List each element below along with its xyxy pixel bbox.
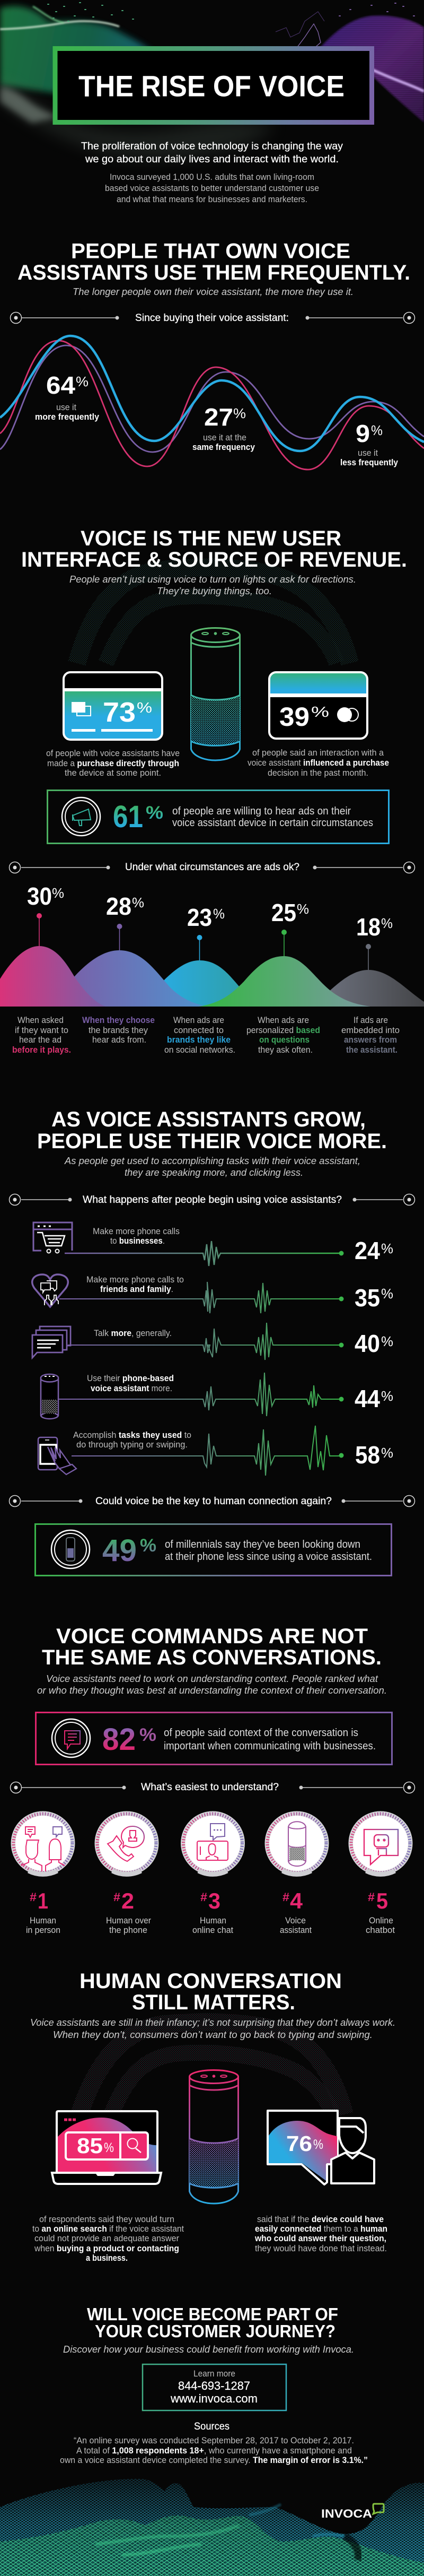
icon: video chat	[197, 1824, 228, 1860]
captions: ad circumstances: the brands they	[89, 1026, 148, 1035]
captions: ad circumstances: When ads are	[258, 1016, 309, 1025]
stat: 64%: more frequently	[35, 412, 100, 422]
intro text: The proliferation of voice technology is changing the way	[81, 140, 343, 152]
section 5 heading: STILL MATTERS.	[132, 1991, 295, 2014]
icon: heart with people	[32, 1274, 68, 1307]
divider: since buying: Since buying their voice assistant:	[135, 313, 289, 324]
stat: 27%: %	[233, 405, 246, 421]
captions: ad circumstances: If ads are	[354, 1016, 388, 1025]
closing heading	[63, 2304, 354, 2355]
section 3 heading	[37, 1108, 387, 1178]
row: voice assistant 44%: %	[381, 1388, 393, 1404]
card: 39%: 39	[279, 702, 310, 732]
rank label: Online	[369, 1916, 393, 1926]
section 1 heading: ASSISTANTS USE THEM FREQUENTLY.	[17, 261, 410, 284]
divider: ads ok: Under what circumstances are ads ok?	[125, 862, 299, 873]
icon: laptop 85%: %	[104, 2140, 114, 2155]
rank label: #	[200, 1890, 207, 1904]
rank label	[366, 1888, 395, 1935]
row: tasks 58%: %	[381, 1445, 393, 1461]
rank label: #	[368, 1890, 375, 1904]
captions: ad circumstances: brands they like	[167, 1035, 231, 1045]
row: tasks 58%: 58	[355, 1441, 380, 1469]
logo: Invoca: INVOCA	[321, 2507, 372, 2520]
callout: 82%	[36, 1713, 392, 1765]
section 3 heading: AS VOICE ASSISTANTS GROW,	[51, 1108, 366, 1131]
callout: 61%: voice assistant device in certain circumstances	[172, 817, 373, 829]
callout: 61%	[48, 791, 389, 844]
icon: speech bubble and person 76%: 76	[286, 2131, 312, 2156]
rank label: Voice	[285, 1916, 306, 1926]
divider: human connection: Could voice be the key to human connection again?	[95, 1496, 332, 1507]
callout: 49%	[35, 1524, 391, 1576]
card: 73%	[64, 672, 162, 740]
section 4 heading	[37, 1625, 387, 1696]
icon: chatbot bubble	[364, 1829, 398, 1864]
pin: 28%: 28	[106, 892, 131, 920]
pin: 28%: %	[132, 895, 144, 910]
icon: browser cart	[33, 1222, 72, 1253]
caption: 85%: to an online search if the voice assistant	[32, 2224, 184, 2234]
sources	[60, 2421, 368, 2465]
rank label: #	[30, 1890, 37, 1904]
caption: 76%: they would have done that instead.	[255, 2244, 387, 2253]
sources: own a voice assistant device completed the survey. The margin of error is 3.1%.”	[60, 2456, 368, 2465]
stat: 27%: use it at the	[203, 433, 246, 443]
caption: 76%: easily connected them to a human	[255, 2224, 387, 2234]
contact box: Learn more	[193, 2369, 235, 2379]
callout: 82%: of people said context of the conversation is	[164, 1727, 358, 1739]
section 3 heading: they are speaking more, and clicking less.	[125, 1167, 303, 1178]
stat: 64%: 64	[46, 371, 75, 399]
sources: “An online survey was conducted September 28, 2017 to October 2, 2017.	[74, 2436, 354, 2445]
row: voice assistant 44%: voice assistant more.	[91, 1384, 172, 1393]
dot mesh dome behind second speaker	[77, 2022, 344, 2122]
rank label: 5	[376, 1888, 388, 1913]
callout: 82%: 82	[102, 1722, 136, 1757]
section 2 heading: People aren’t just using voice to turn on lights or ask for directions.	[69, 574, 356, 585]
captions: ad circumstances: answers from	[344, 1035, 397, 1045]
callout: 82%: important when communicating with businesses.	[164, 1740, 376, 1752]
closing heading: WILL VOICE BECOME PART OF	[87, 2304, 338, 2324]
callout: 49%: at their phone less since using a voice assistant.	[165, 1551, 372, 1563]
sources: A total of 1,008 respondents 18+, who currently have a smartphone and	[76, 2446, 352, 2456]
rank label: assistant	[280, 1926, 312, 1935]
section 5 heading: Voice assistants are still in their infancy; it’s not surprising that they don’t always work.	[30, 2017, 395, 2028]
section 5 heading: When they don’t, consumers don’t want to go back to typing and swiping.	[53, 2029, 373, 2040]
sources: Sources	[194, 2421, 229, 2432]
pin: 23%	[187, 904, 225, 960]
rank 5: online chatbot	[349, 1811, 412, 1935]
caption: 39%: of people said an interaction with a	[252, 748, 384, 758]
row: voice assistant 44%	[41, 1373, 393, 1419]
caption: 73%: made a purchase directly through	[47, 759, 179, 768]
captions: ad circumstances: connected to	[174, 1026, 224, 1035]
rank label: 1	[38, 1888, 48, 1913]
rank label	[280, 1888, 312, 1935]
rank label	[106, 1888, 151, 1935]
dot mesh dome behind speaker	[77, 568, 350, 663]
card: 73%: 73	[103, 697, 136, 728]
icon: megaphone	[62, 797, 100, 836]
divider: since buying	[11, 312, 414, 324]
icon: smart speaker	[191, 628, 240, 760]
section 1 heading: The longer people own their voice assistant, the more they use it.	[73, 286, 354, 297]
captions: ad circumstances: on social networks.	[164, 1045, 235, 1055]
icon: speech bubble and person 76%: %	[313, 2137, 323, 2152]
wireframe terrain	[0, 2479, 424, 2576]
closing heading: YOUR CUSTOMER JOURNEY?	[95, 2321, 335, 2341]
section 5 heading	[30, 1970, 395, 2040]
pin: 28%	[106, 892, 144, 950]
icon: smart speaker pink	[190, 2070, 238, 2204]
captions: ad circumstances: they ask often.	[258, 1045, 313, 1055]
card: 73%: %	[137, 699, 152, 716]
divider: what happens	[10, 1194, 414, 1205]
row: talk more 40%	[32, 1323, 393, 1360]
title: THE RISE OF VOICE	[78, 69, 344, 103]
caption: 85%: of respondents said they would turn	[39, 2215, 174, 2224]
icon: laptop 85%: 85	[77, 2133, 103, 2158]
contact box	[143, 2364, 286, 2410]
captions: ad circumstances: personalized based	[246, 1026, 320, 1035]
section 5 heading: HUMAN CONVERSATION	[80, 1970, 342, 1993]
stat: 27%: same frequency	[192, 443, 255, 452]
contact box: 844-693-1287	[178, 2379, 250, 2392]
stat: 64%	[35, 371, 100, 422]
row: talk more 40%: 40	[355, 1330, 380, 1357]
rank 2: human over the phone	[94, 1811, 159, 1935]
row: friends 35%: Make more phone calls to	[86, 1275, 184, 1285]
icon: speaker in circle	[51, 1530, 90, 1568]
callout: 82%: %	[139, 1725, 156, 1745]
section 2 heading: VOICE IS THE NEW USER	[81, 527, 341, 550]
caption: 39%	[248, 748, 389, 778]
caption: 39%: decision in the past month.	[268, 768, 368, 778]
pin: 18%: 18	[356, 913, 381, 941]
pin: 25%: 25	[271, 899, 296, 926]
rank 3: human online chat	[181, 1811, 245, 1935]
caption: 76%: who could answer their question,	[254, 2234, 386, 2243]
icon: chat stack	[32, 1326, 70, 1358]
rank label: in person	[26, 1926, 60, 1935]
caption: 39%: voice assistant influenced a purchase	[248, 758, 389, 768]
rank label: online chat	[192, 1926, 233, 1935]
icon: chat in circle	[52, 1719, 90, 1757]
stat: 27%	[192, 403, 255, 452]
stat: 27%: 27	[204, 403, 233, 431]
row: tasks 58%: do through typing or swiping.	[76, 1440, 188, 1450]
closing heading: Discover how your business could benefit from working with Invoca.	[63, 2344, 354, 2355]
caption: 73%	[46, 749, 180, 778]
icon: cards	[72, 702, 91, 716]
rank label: the phone	[109, 1926, 147, 1935]
row: voice assistant 44%: 44	[355, 1385, 380, 1412]
section 4 heading: THE SAME AS CONVERSATIONS.	[42, 1646, 382, 1669]
section 2 heading: They’re buying things, too.	[157, 585, 272, 596]
intro text: and what that means for businesses and marketers.	[117, 195, 307, 204]
row: talk more 40%: Talk more, generally.	[94, 1329, 172, 1338]
stat: 9%: use it	[358, 448, 378, 458]
rank 1: human in person	[11, 1811, 75, 1935]
row: friends 35%: friends and family.	[100, 1285, 173, 1294]
callout: 49%: %	[140, 1536, 156, 1556]
callout: 61%: of people are willing to hear ads on their	[172, 805, 351, 817]
section 4 heading: Voice assistants need to work on understanding context. People ranked what	[46, 1673, 378, 1684]
rank label: 2	[121, 1888, 134, 1913]
captions: ad circumstances: embedded into	[341, 1026, 400, 1035]
rank label	[26, 1888, 60, 1935]
card: 39%: %	[311, 704, 329, 720]
icon: logo speech bubble	[373, 2504, 384, 2514]
stat: 9%: 9	[356, 420, 370, 447]
row: tasks 58%: Accomplish tasks they used to	[73, 1430, 191, 1440]
pin: 23%: 23	[187, 904, 212, 931]
caption: 76%: said that if the device could have	[257, 2215, 384, 2224]
divider: easiest: What’s easiest to understand?	[141, 1782, 279, 1793]
rank label: Human over	[106, 1916, 151, 1926]
row: tasks 58%	[38, 1426, 393, 1476]
section 3 heading: PEOPLE USE THEIR VOICE MORE.	[37, 1130, 387, 1153]
divider: easiest	[11, 1782, 414, 1793]
section 1 heading: PEOPLE THAT OWN VOICE	[71, 240, 350, 263]
pin: 23%: %	[213, 906, 225, 922]
divider: what happens: What happens after people begin using voice assistants?	[83, 1194, 342, 1205]
stat: 9%: less frequently	[340, 458, 399, 467]
callout: 49%: 49	[102, 1533, 137, 1568]
row: friends 35%	[32, 1274, 393, 1313]
pin: 18%	[356, 913, 393, 970]
card: 39%	[269, 672, 367, 739]
pin: 30%: 30	[27, 882, 52, 910]
header wave artwork	[0, 3, 424, 159]
row: businesses 24%: Make more phone calls	[93, 1227, 180, 1236]
stat: 9%	[340, 420, 399, 467]
icon: person	[331, 2118, 374, 2183]
captions: ad circumstances: When asked	[17, 1016, 64, 1025]
pin: 18%: %	[381, 915, 393, 931]
rank 4: voice assistant	[265, 1811, 329, 1935]
caption: 85%: could not provide an adequate answer	[34, 2234, 179, 2243]
section 2 heading: INTERFACE & SOURCE OF REVENUE.	[21, 548, 407, 571]
captions: ad circumstances: When ads are	[173, 1016, 224, 1025]
rank label: chatbot	[366, 1926, 395, 1935]
captions: ad circumstances	[12, 1016, 400, 1055]
mountain chart	[0, 882, 424, 1007]
rank label: Human	[200, 1916, 226, 1926]
caption: 73%: of people with voice assistants have	[46, 749, 180, 758]
row: businesses 24%: 24	[355, 1237, 380, 1264]
icon: two people	[21, 1827, 65, 1871]
caption: 85%	[32, 2215, 184, 2263]
row: voice assistant 44%: Use their phone-based	[87, 1374, 174, 1383]
row: friends 35%: 35	[355, 1284, 380, 1312]
logo: Invoca	[321, 2504, 384, 2520]
pin: 25%	[271, 899, 309, 956]
captions: ad circumstances: if they want to	[15, 1026, 68, 1035]
captions: ad circumstances: When they choose	[82, 1016, 155, 1025]
wave chart	[0, 336, 424, 470]
pin: 30%	[27, 882, 64, 946]
rank label: 4	[290, 1888, 303, 1913]
row: businesses 24%: to businesses.	[110, 1236, 165, 1246]
captions: ad circumstances: on questions	[259, 1035, 310, 1045]
icon: laptop 85%	[52, 2111, 161, 2184]
stat: 64%: use it	[56, 403, 76, 412]
callout: 61%: %	[146, 803, 163, 823]
rank label: #	[282, 1890, 289, 1904]
icon: speaker	[288, 1822, 306, 1866]
icon: magnifier	[127, 2138, 141, 2153]
intro text: Invoca surveyed 1,000 U.S. adults that own living-room	[110, 172, 314, 182]
icon: speech bubble and person 76%	[268, 2111, 374, 2184]
intro text: based voice assistants to better understand customer use	[105, 184, 319, 193]
icon: phone and hand	[38, 1437, 76, 1475]
row: talk more 40%: %	[381, 1333, 393, 1349]
section 4 heading: or who they thought was best at understanding the context of their conversation.	[37, 1685, 387, 1696]
pin: 30%: %	[52, 885, 64, 901]
rank label: 3	[208, 1888, 220, 1913]
row: friends 35%: %	[381, 1286, 393, 1302]
divider: ads ok	[10, 862, 414, 873]
icon: small speaker	[41, 1374, 58, 1419]
captions: ad circumstances: hear the ad	[19, 1035, 61, 1045]
title frame	[55, 49, 372, 122]
intro text: we go about our daily lives and interact with the world.	[85, 153, 339, 165]
callout: 49%: of millennials say they’ve been looking down	[165, 1539, 360, 1550]
caption: 85%: when buying a product or contacting	[34, 2244, 179, 2253]
contact box: www.invoca.com	[170, 2392, 258, 2405]
caption: 85%: a business.	[86, 2253, 128, 2263]
stat: 9%: %	[371, 422, 383, 438]
intro text	[81, 140, 343, 204]
row: businesses 24%	[33, 1222, 393, 1266]
rank label	[192, 1888, 233, 1935]
caption: 73%: the device at some point.	[65, 768, 161, 778]
stat: 64%: %	[76, 374, 89, 389]
captions: ad circumstances: before it plays.	[12, 1045, 71, 1055]
callout: 61%: 61	[113, 800, 143, 834]
captions: ad circumstances: hear ads from.	[92, 1035, 146, 1045]
captions: ad circumstances: the assistant.	[346, 1045, 398, 1055]
section 3 heading: As people get used to accomplishing tasks with their voice assistant,	[64, 1155, 360, 1166]
divider: human connection	[10, 1495, 414, 1507]
section 2 heading	[21, 527, 407, 596]
section 1 heading	[17, 240, 410, 297]
pin: 25%: %	[297, 901, 309, 917]
row: businesses 24%: %	[381, 1241, 393, 1256]
caption: 76%	[254, 2215, 387, 2253]
rank label: Human	[30, 1916, 56, 1926]
rank label: #	[113, 1890, 120, 1904]
section 4 heading: VOICE COMMANDS ARE NOT	[56, 1625, 368, 1648]
icon: toggle coins	[337, 707, 358, 722]
icon: phone with agent	[108, 1826, 144, 1861]
